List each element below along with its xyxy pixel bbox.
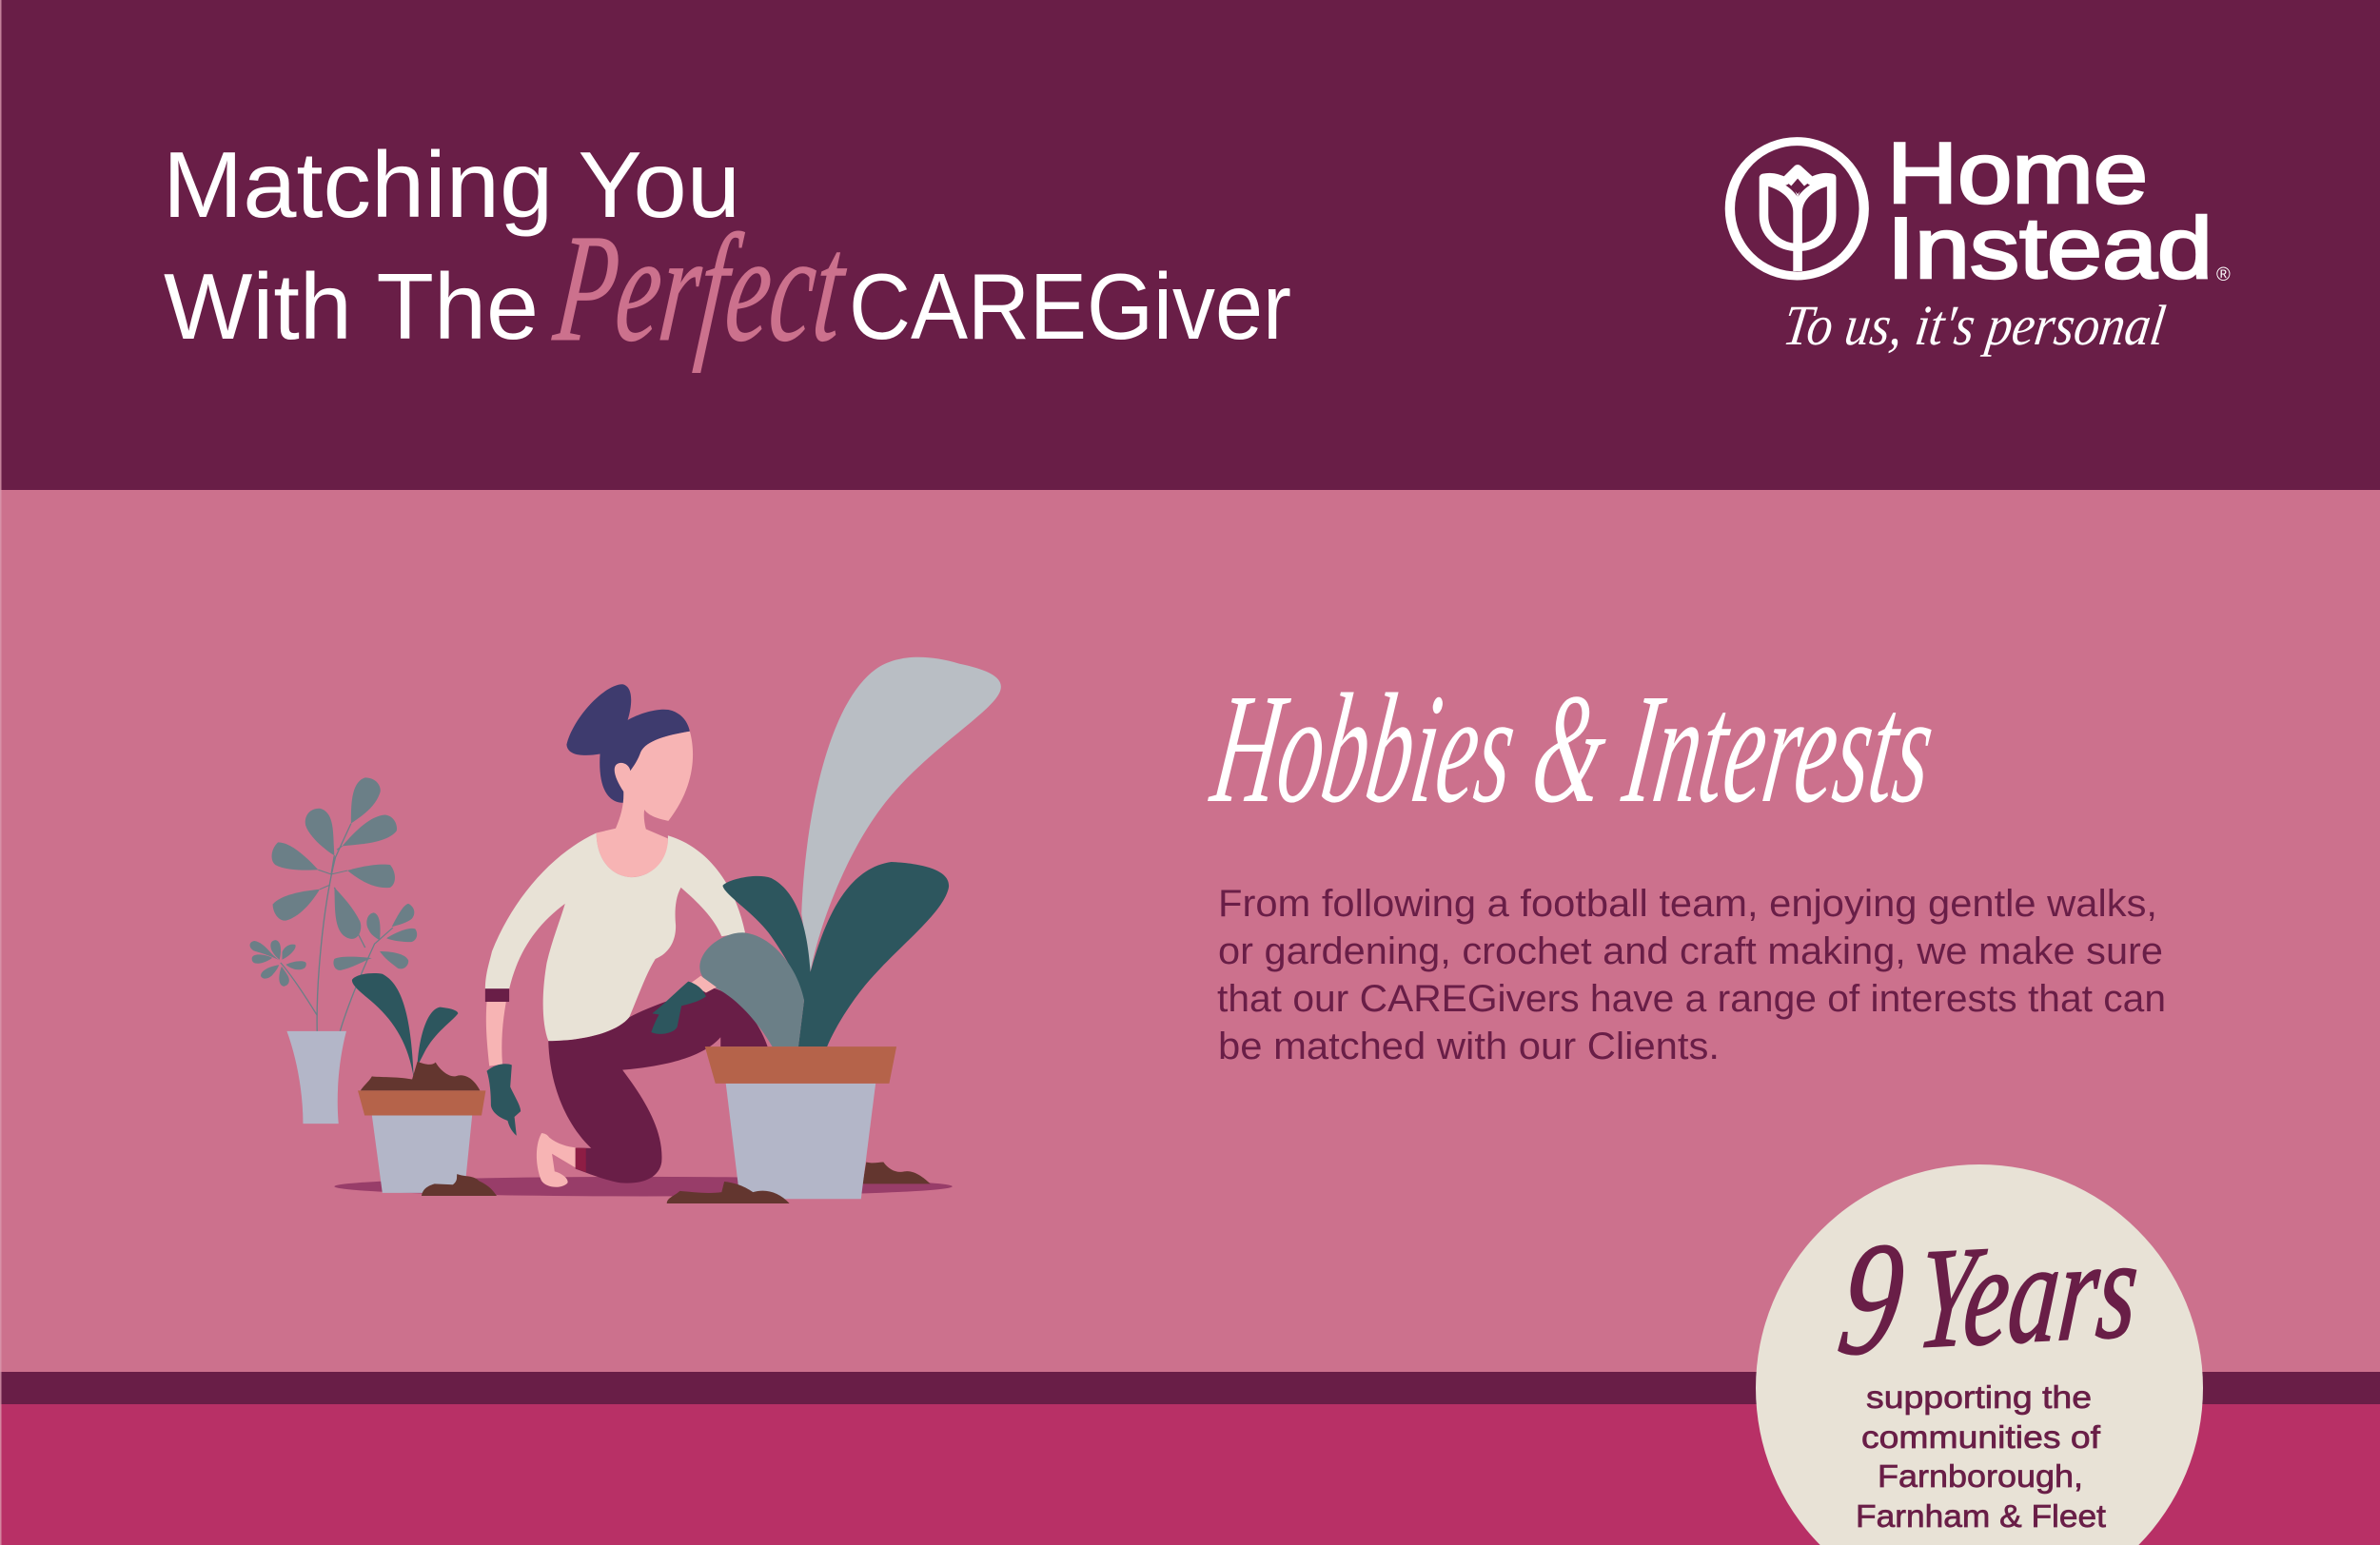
large plant leaves (699, 862, 949, 1046)
illustration: woman gardening (250, 657, 1001, 1203)
large pot (705, 1046, 896, 1199)
script word: Perfect: Perfect (548, 203, 855, 374)
body paragraph: From following a football team, enjoying gentle walks, (1218, 883, 2157, 925)
tagline: To us, it's personal (1780, 294, 2169, 358)
ground shadow (334, 1177, 953, 1196)
callout: 9 years badge (1756, 1164, 2203, 1545)
icon: tulip in ring (1730, 142, 1864, 276)
badge circle (1756, 1164, 2203, 1545)
hand and glove on knee (651, 976, 717, 1034)
small potted plant (352, 973, 497, 1196)
badge text: Farnham & Fleet (1856, 1498, 2106, 1534)
background: pink main panel (0, 490, 2380, 1372)
body paragraph: be matched with our Clients. (1218, 1026, 1720, 1067)
woman figure (485, 684, 768, 1187)
crimson footer band (0, 1404, 2380, 1545)
title (163, 132, 1291, 374)
header band (0, 0, 2380, 490)
badge text: Farnborough, (1878, 1458, 2083, 1494)
logo: Home Instead (1730, 126, 2231, 358)
badge text: supporting the (1866, 1379, 2092, 1415)
badge text: communities of (1861, 1419, 2101, 1455)
wordmark: Instead: Instead (1887, 201, 2213, 297)
small branching plant in vase (250, 777, 417, 1124)
title line 2 end: CAREGiver (849, 254, 1291, 359)
registered mark: ® (2216, 264, 2231, 285)
dark footer stripe (0, 1372, 2380, 1404)
body paragraph: or gardening, crochet and craft making, we make sure (1218, 930, 2163, 972)
wordmark: Home: Home (1887, 126, 2148, 222)
body paragraph (1217, 883, 2166, 1067)
soil mound in front of large pot (667, 1182, 790, 1203)
soil mound behind large pot (862, 1162, 931, 1183)
script: Years: Years (1912, 1208, 2144, 1379)
title line 2 start: With The (164, 254, 539, 359)
title line 1: Matching You (163, 132, 740, 237)
script: 9: 9 (1830, 1209, 1914, 1388)
badge text (1856, 1379, 2106, 1534)
grey back leaf (801, 657, 1001, 972)
body paragraph: that our CAREGivers have a range of interests that can (1217, 978, 2166, 1020)
